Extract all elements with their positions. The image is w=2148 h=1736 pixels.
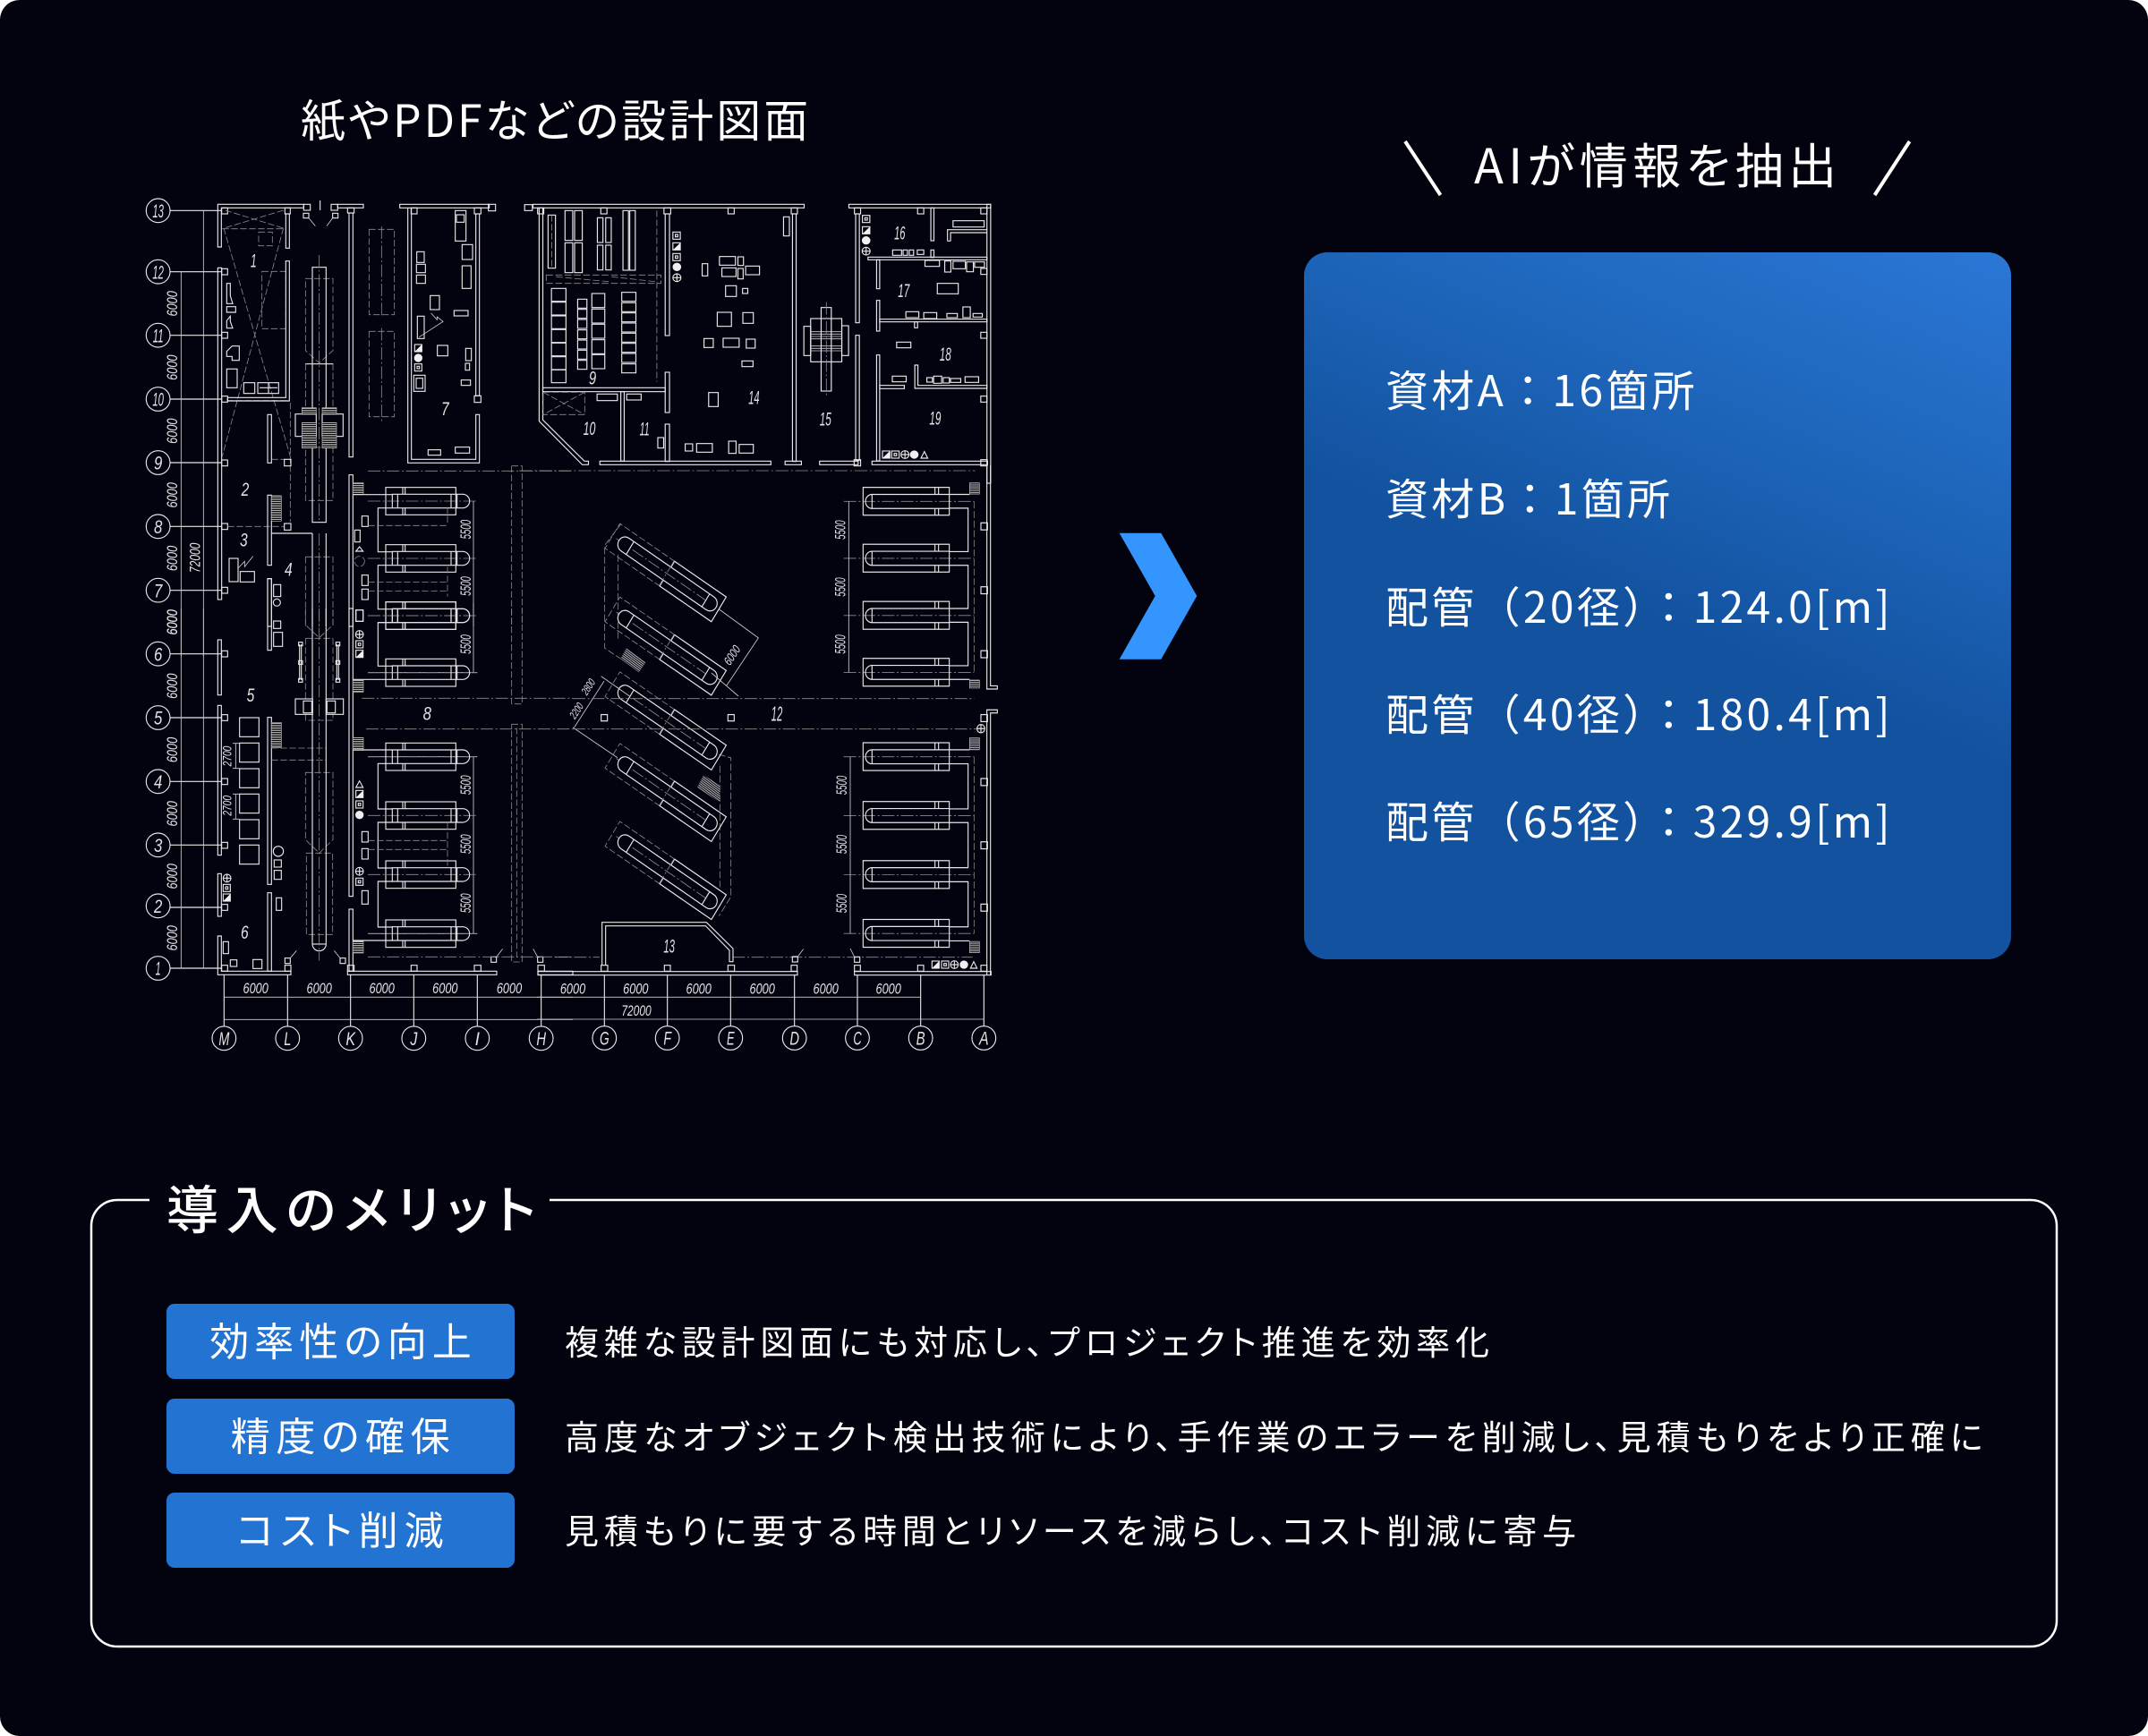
floor plan: bottom axis G to A and room 13: 6000 (813, 980, 839, 997)
right tank rows: 5500 (833, 776, 850, 795)
angled tanks: 12 (771, 702, 782, 726)
floor plan: bottom axis G to A and room 13: B (916, 1028, 925, 1050)
floor plan: bottom axis G to A and room 13: A (977, 1028, 989, 1050)
grid bubbles 6 to 1 and M to H (146, 602, 573, 1051)
left tank row, upper: 5500 (457, 576, 474, 596)
floor plan: upper middle and right rooms (519, 204, 991, 483)
grid bubbles 6 to 1 and M to H: 5 (154, 708, 162, 729)
right tank rows: 5500 (831, 520, 849, 540)
left tank row, lower (347, 602, 573, 974)
floor plan: bottom axis G to A and room 13: G (600, 1028, 609, 1050)
result: pipe 40: 配管（40径）：180.4[m] (1385, 680, 1893, 743)
floor plan: bottom axis G to A and room 13: F (663, 1028, 672, 1050)
left tank row, upper (349, 466, 573, 629)
grid bubbles 13 to 7: 7 (154, 580, 163, 601)
grid bubbles 13 to 7: 11 (153, 325, 164, 346)
room 7: 7 (441, 398, 449, 420)
room 5 and 6 walls and equipment: 6 (241, 922, 249, 943)
result: pipe 65: 配管（65径）：329.9[m] (1385, 787, 1893, 850)
grid bubbles 6 to 1 and M to H: H (536, 1028, 546, 1050)
grid bubbles 6 to 1 and M to H: 6000 (164, 736, 181, 762)
floor plan: upper left section (146, 199, 573, 656)
benefit text: efficiency: 複雑な設計図面にも対応し、プロジェクト推進を効率化 (565, 1315, 1495, 1364)
arrow (1119, 533, 1198, 660)
rooms 9 to 11 storage (524, 204, 805, 464)
floor plan: bottom axis G to A and room 13: 6000 (749, 980, 775, 997)
heading: benefits: 導入のメリット (166, 1169, 543, 1244)
benefit text: cost: 見積もりに要する時間とリソースを減らし、コスト削減に寄与 (565, 1503, 1581, 1553)
rooms 16 to 19: 19 (929, 407, 941, 430)
angled tanks: 2800 (579, 677, 598, 698)
grid bubbles 13 to 7 (146, 199, 221, 656)
room 1 to 4 walls and equipment: 4 (285, 558, 293, 580)
grid bubbles 6 to 1 and M to H: 6000 (369, 980, 395, 997)
rooms 9 to 11 storage: 11 (640, 418, 650, 440)
rooms 9 to 11 storage: 10 (584, 417, 595, 439)
benefit tag: accuracy: 精度の確保 (231, 1405, 456, 1462)
result: material A: 資材A：16箇所 (1385, 356, 1698, 419)
floor plan: lower left section (146, 579, 573, 1051)
grid bubbles 6 to 1 and M to H: I (475, 1028, 480, 1050)
slash left (1403, 140, 1443, 197)
grid bubbles 6 to 1 and M to H: 6000 (164, 801, 181, 826)
room 15 machine (804, 302, 848, 430)
floor plan: bottom axis G to A and room 13: D (789, 1028, 799, 1050)
floor plan: bottom axis G to A and room 13: 13 (663, 936, 675, 957)
grid bubbles 13 to 7: 12 (152, 261, 164, 283)
rooms 16 to 19 (519, 204, 991, 483)
grid bubbles 6 to 1 and M to H: J (410, 1028, 418, 1050)
left tank row, lower: 8 (423, 703, 431, 725)
slash right (1873, 140, 1912, 197)
floor plan: centre angled tanks and right tanks (567, 465, 997, 974)
grid bubbles 6 to 1 and M to H: 6000 (164, 925, 181, 950)
heading text: AIが情報を抽出 (1474, 127, 1842, 198)
floor plan: bottom axis G to A and room 13: 6000 (623, 980, 649, 997)
floor plan: bottom axis G to A and room 13: E (727, 1028, 735, 1050)
grid bubbles 6 to 1 and M to H: 6000 (497, 980, 523, 997)
left tank row, lower: 5500 (457, 893, 474, 913)
left tank row, lower: 5500 (457, 634, 474, 654)
room 5 and 6 walls and equipment: 2700 (219, 796, 234, 816)
left tank row, upper: 5500 (457, 519, 474, 539)
grid bubbles 13 to 7: 10 (152, 389, 164, 411)
room 5 and 6 walls and equipment: 5 (247, 685, 254, 706)
grid bubbles 6 to 1 and M to H: M (218, 1028, 229, 1050)
grid bubbles 13 to 7: 6000 (164, 291, 181, 316)
grid bubbles 13 to 7: 6000 (164, 482, 181, 507)
grid bubbles 13 to 7: 9 (154, 453, 162, 474)
grid bubbles 6 to 1 and M to H: 3 (154, 835, 162, 856)
right tank rows: 5500 (833, 835, 850, 854)
benefit tag: efficiency (166, 1304, 515, 1379)
floor plan: bottom axis G to A and room 13: C (853, 1028, 862, 1050)
grid bubbles 6 to 1 and M to H: 6000 (432, 980, 458, 997)
room 7 (400, 204, 496, 463)
result: pipe 20: 配管（20径）：124.0[m] (1385, 573, 1893, 635)
grid bubbles 13 to 7: 6000 (164, 545, 181, 571)
benefit tag: accuracy (166, 1399, 515, 1474)
benefit tag: efficiency: 効率性の向上 (209, 1310, 477, 1367)
room 15 machine: 15 (820, 408, 831, 430)
rooms 16 to 19: 16 (894, 222, 906, 243)
grid bubbles 13 to 7: 72000 (186, 542, 203, 573)
room 1 to 4 walls and equipment (217, 200, 363, 626)
grid bubbles 6 to 1 and M to H: 4 (154, 771, 162, 793)
grid bubbles 13 to 7: 6000 (164, 418, 181, 444)
right tank rows: 5500 (831, 634, 849, 654)
grid bubbles 6 to 1 and M to H: 6000 (243, 980, 268, 997)
room 1 to 4 walls and equipment: 1 (251, 250, 257, 271)
room 5 and 6 walls and equipment (217, 579, 345, 974)
grid bubbles 6 to 1 and M to H: 2 (153, 896, 162, 917)
grid bubbles 6 to 1 and M to H: 6000 (164, 609, 181, 634)
grid bubbles 6 to 1 and M to H: 6 (154, 643, 162, 665)
benefit text: accuracy: 高度なオブジェクト検出技術により、手作業のエラーを削減し、見積もりをより正確に (565, 1410, 1988, 1459)
heading: paper drawings: 紙やPDFなどの設計図面 (301, 86, 811, 150)
floor plan: bottom axis G to A and room 13 (537, 923, 996, 1050)
grid bubbles 13 to 7: 8 (154, 516, 162, 538)
central conveyor, upper (295, 226, 395, 626)
grid bubbles 6 to 1 and M to H: 6000 (306, 980, 332, 997)
heading: AI extraction (1403, 127, 1912, 198)
angled tanks: 6000 (720, 642, 743, 668)
rooms 9 to 11 storage: 9 (589, 367, 596, 388)
floor plan: bottom axis G to A and room 13: 6000 (686, 980, 712, 997)
central conveyor, lower (295, 608, 344, 960)
benefit tag: cost: コスト削減 (236, 1499, 450, 1556)
grid bubbles 6 to 1 and M to H: K (345, 1028, 356, 1050)
grid bubbles 13 to 7: 6000 (164, 354, 181, 380)
room 1 to 4 walls and equipment: 2 (241, 479, 249, 500)
grid bubbles 6 to 1 and M to H: 6000 (164, 673, 181, 699)
rooms 16 to 19: 18 (940, 343, 951, 365)
right tank rows (831, 465, 997, 974)
right tank rows: 5500 (833, 894, 850, 913)
grid bubbles 6 to 1 and M to H: L (284, 1028, 291, 1050)
grid bubbles 13 to 7: 6000 (164, 609, 181, 634)
floor plan: bottom axis G to A and room 13: 6000 (560, 980, 586, 997)
panel: extracted results (1304, 252, 2011, 959)
rooms 16 to 19: 17 (898, 279, 910, 302)
grid bubbles 6 to 1 and M to H: 6000 (164, 864, 181, 889)
angled tanks: 2200 (567, 701, 586, 722)
benefit tag: cost (166, 1493, 515, 1568)
room 1 to 4 walls and equipment: 3 (240, 530, 248, 551)
floor plan: bottom axis G to A and room 13: 72000 (621, 1002, 652, 1019)
angled tanks (567, 523, 977, 920)
room 14 equipment (672, 217, 789, 454)
panel: benefits frame (90, 1199, 2058, 1648)
grid bubbles 13 to 7: 13 (152, 200, 164, 222)
left tank row, lower: 5500 (457, 834, 474, 854)
result: material B: 資材B：1箇所 (1385, 464, 1673, 527)
right tank rows: 5500 (831, 577, 849, 597)
left tank row, lower: 5500 (457, 775, 474, 795)
room 5 and 6 walls and equipment: 2700 (219, 746, 234, 767)
grid bubbles 6 to 1 and M to H: 1 (156, 958, 161, 980)
floor plan: bottom axis G to A and room 13: 6000 (875, 980, 901, 997)
room 14 equipment: 14 (748, 387, 760, 408)
